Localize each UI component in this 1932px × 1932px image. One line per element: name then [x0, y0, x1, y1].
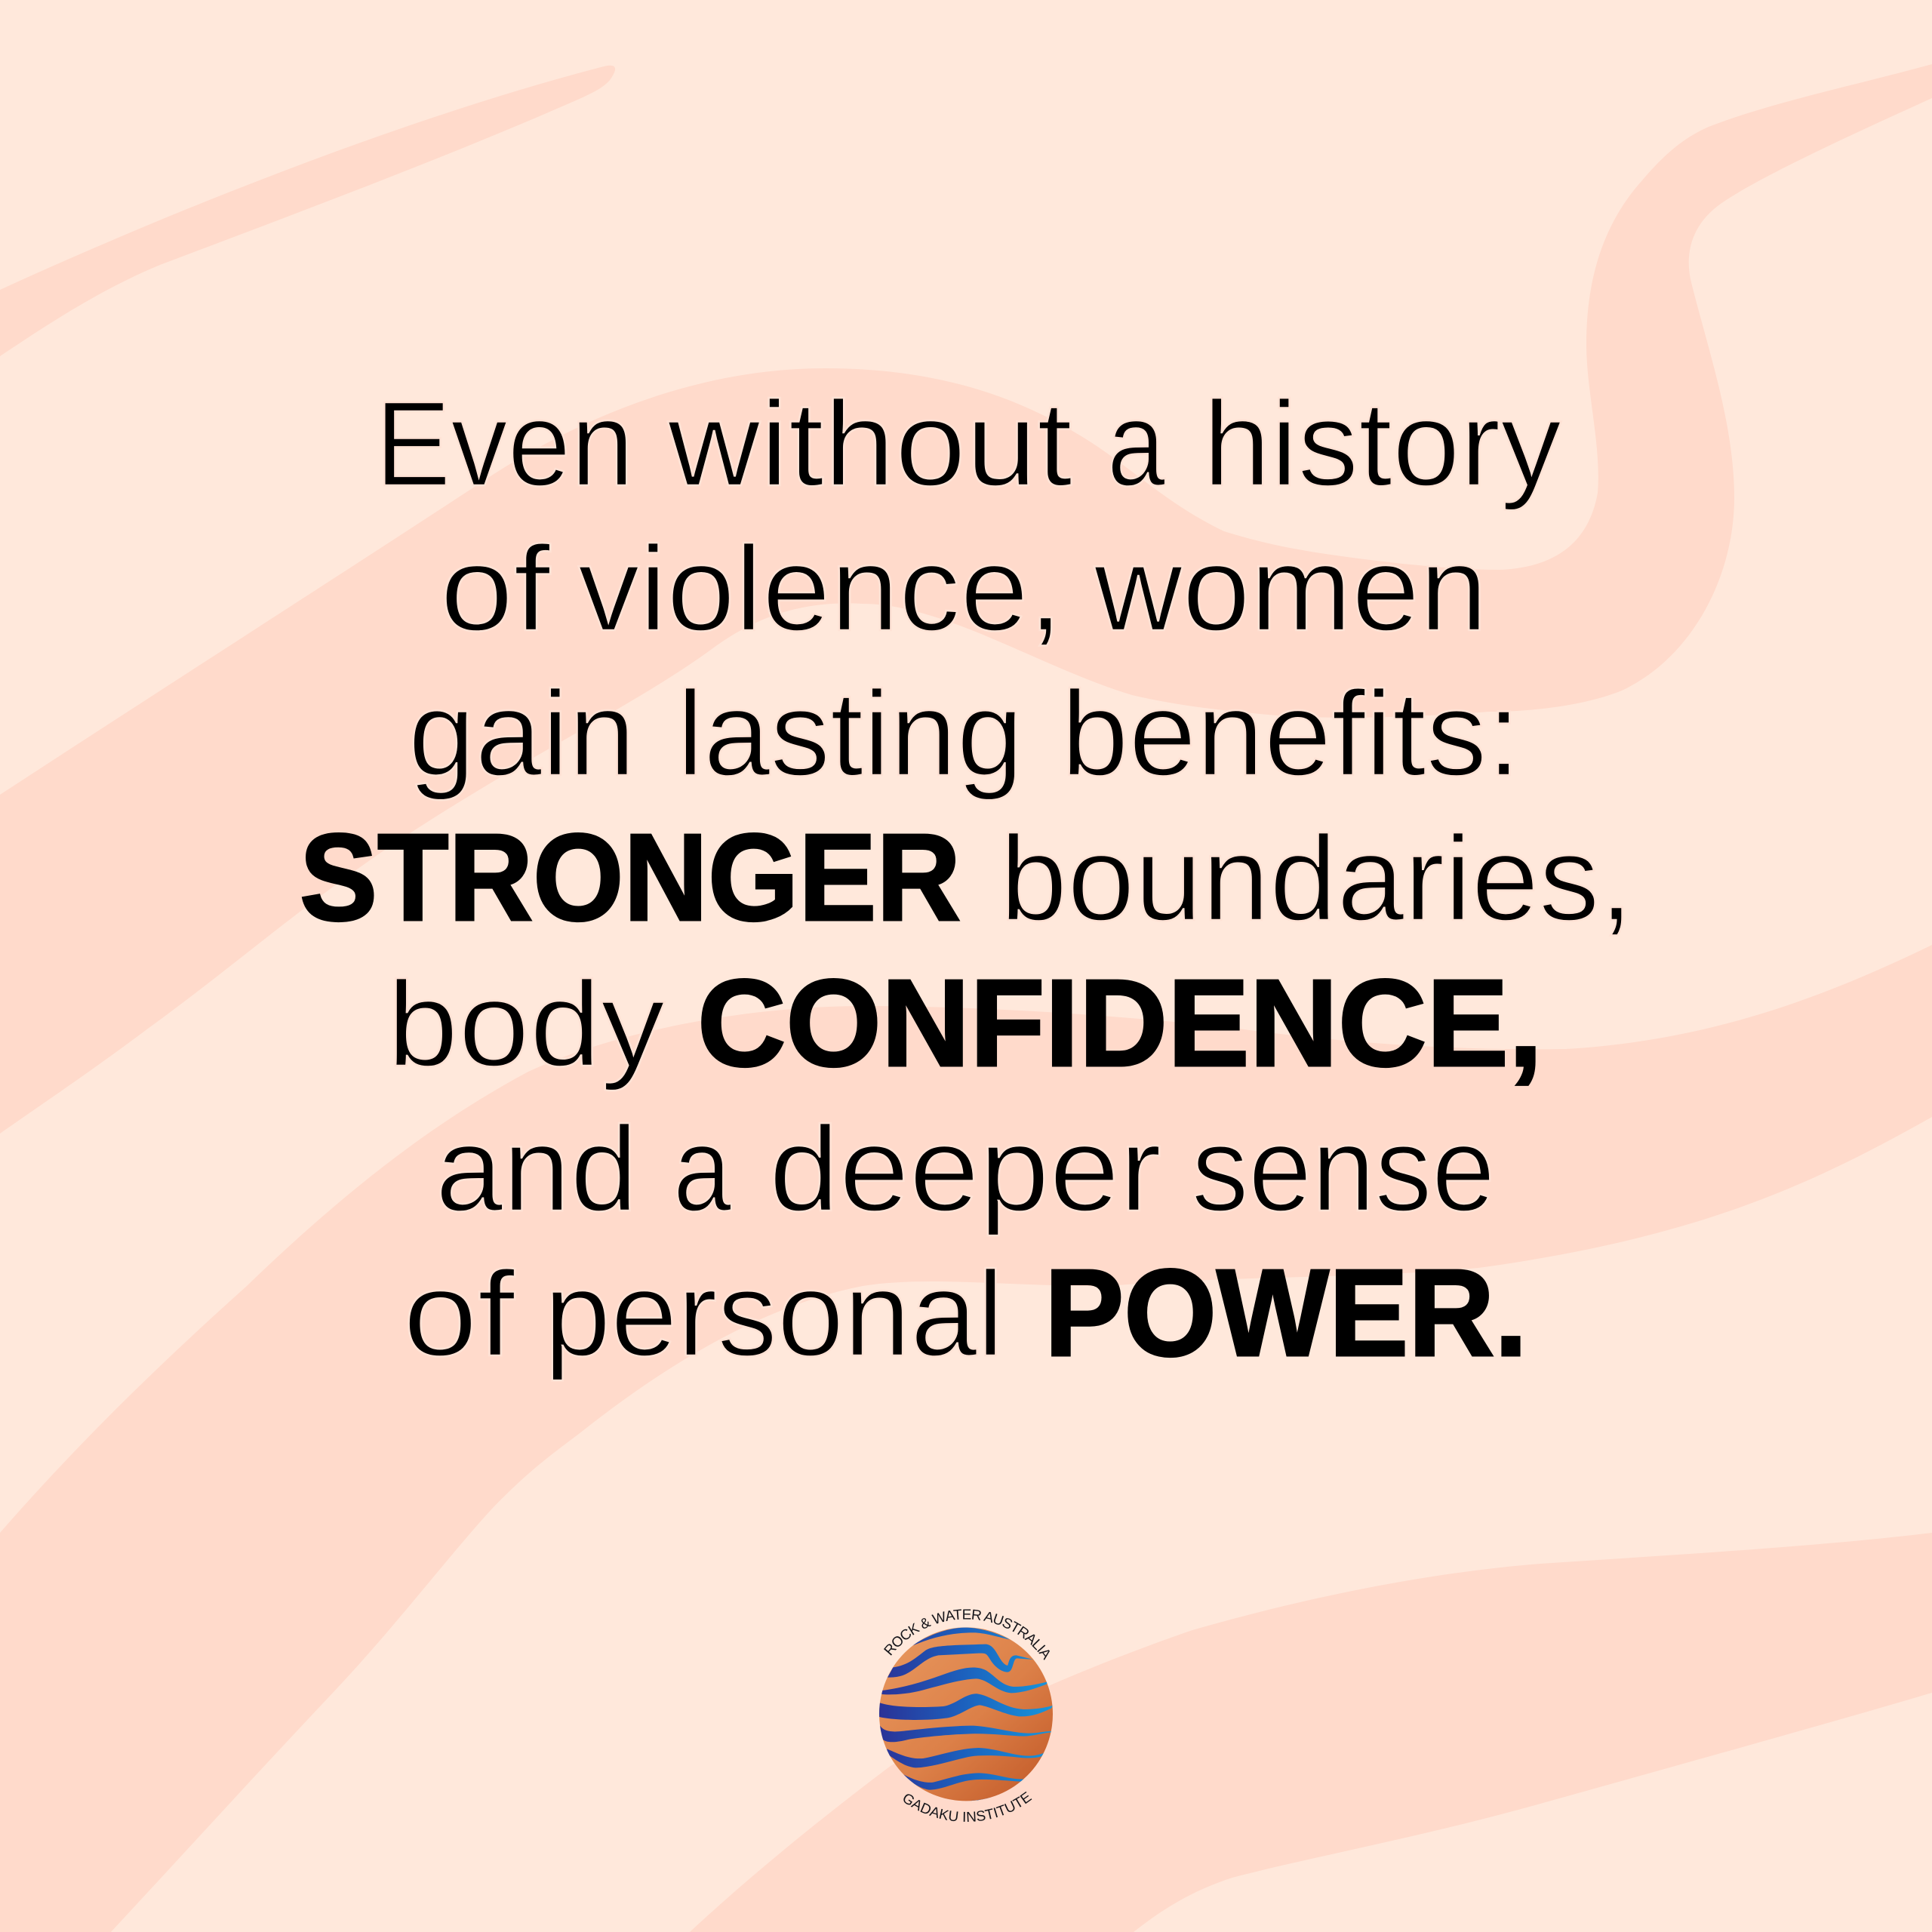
line 1: a [1107, 376, 1165, 511]
line 6: deeper [769, 1101, 1161, 1236]
line 4: STRONGER [300, 808, 961, 946]
line 7: personal [544, 1246, 1004, 1381]
line 3 [408, 666, 1521, 801]
quote text [300, 376, 1633, 1382]
line 7: of [403, 1246, 515, 1381]
line 4 [300, 808, 1633, 946]
logo water bands [879, 1628, 1053, 1804]
line 2: violence, [578, 521, 1063, 656]
line 7: POWER. [1044, 1244, 1527, 1382]
line 6 [435, 1101, 1495, 1236]
background shape: large boomerang [0, 64, 1932, 1134]
line 4: boundaries, [1000, 811, 1633, 946]
line 5: body [387, 956, 665, 1091]
background shape: bottom-right sweep [690, 1533, 1932, 1932]
line 1: history [1203, 376, 1561, 511]
logo disc [879, 1627, 1053, 1801]
line 6: a [673, 1101, 731, 1236]
line 1: Even [375, 376, 634, 511]
line 3: gain [408, 666, 635, 801]
line 5: CONFIDENCE, [697, 954, 1543, 1092]
line 3: benefits: [1061, 666, 1521, 801]
background shape: lower-left sweep [0, 945, 1932, 1932]
line 2: of [440, 521, 551, 656]
logo: Rock & Water Australia / Gadaku Institute [879, 1609, 1053, 1822]
line 7 [403, 1244, 1527, 1382]
line 2: women [1094, 521, 1487, 656]
logo text: bottom arc: GADAKU INSTITUTE [903, 1792, 1032, 1822]
line 6: and [435, 1101, 638, 1236]
line 6: sense [1192, 1101, 1495, 1236]
background shape: top-left sliver [0, 66, 615, 356]
line 2 [440, 521, 1487, 656]
line 3: lasting [677, 666, 1023, 801]
logo text: top arc: ROCK & WATER AUSTRALIA [884, 1609, 1050, 1660]
line 1 [375, 376, 1561, 511]
line 1: without [667, 376, 1072, 511]
